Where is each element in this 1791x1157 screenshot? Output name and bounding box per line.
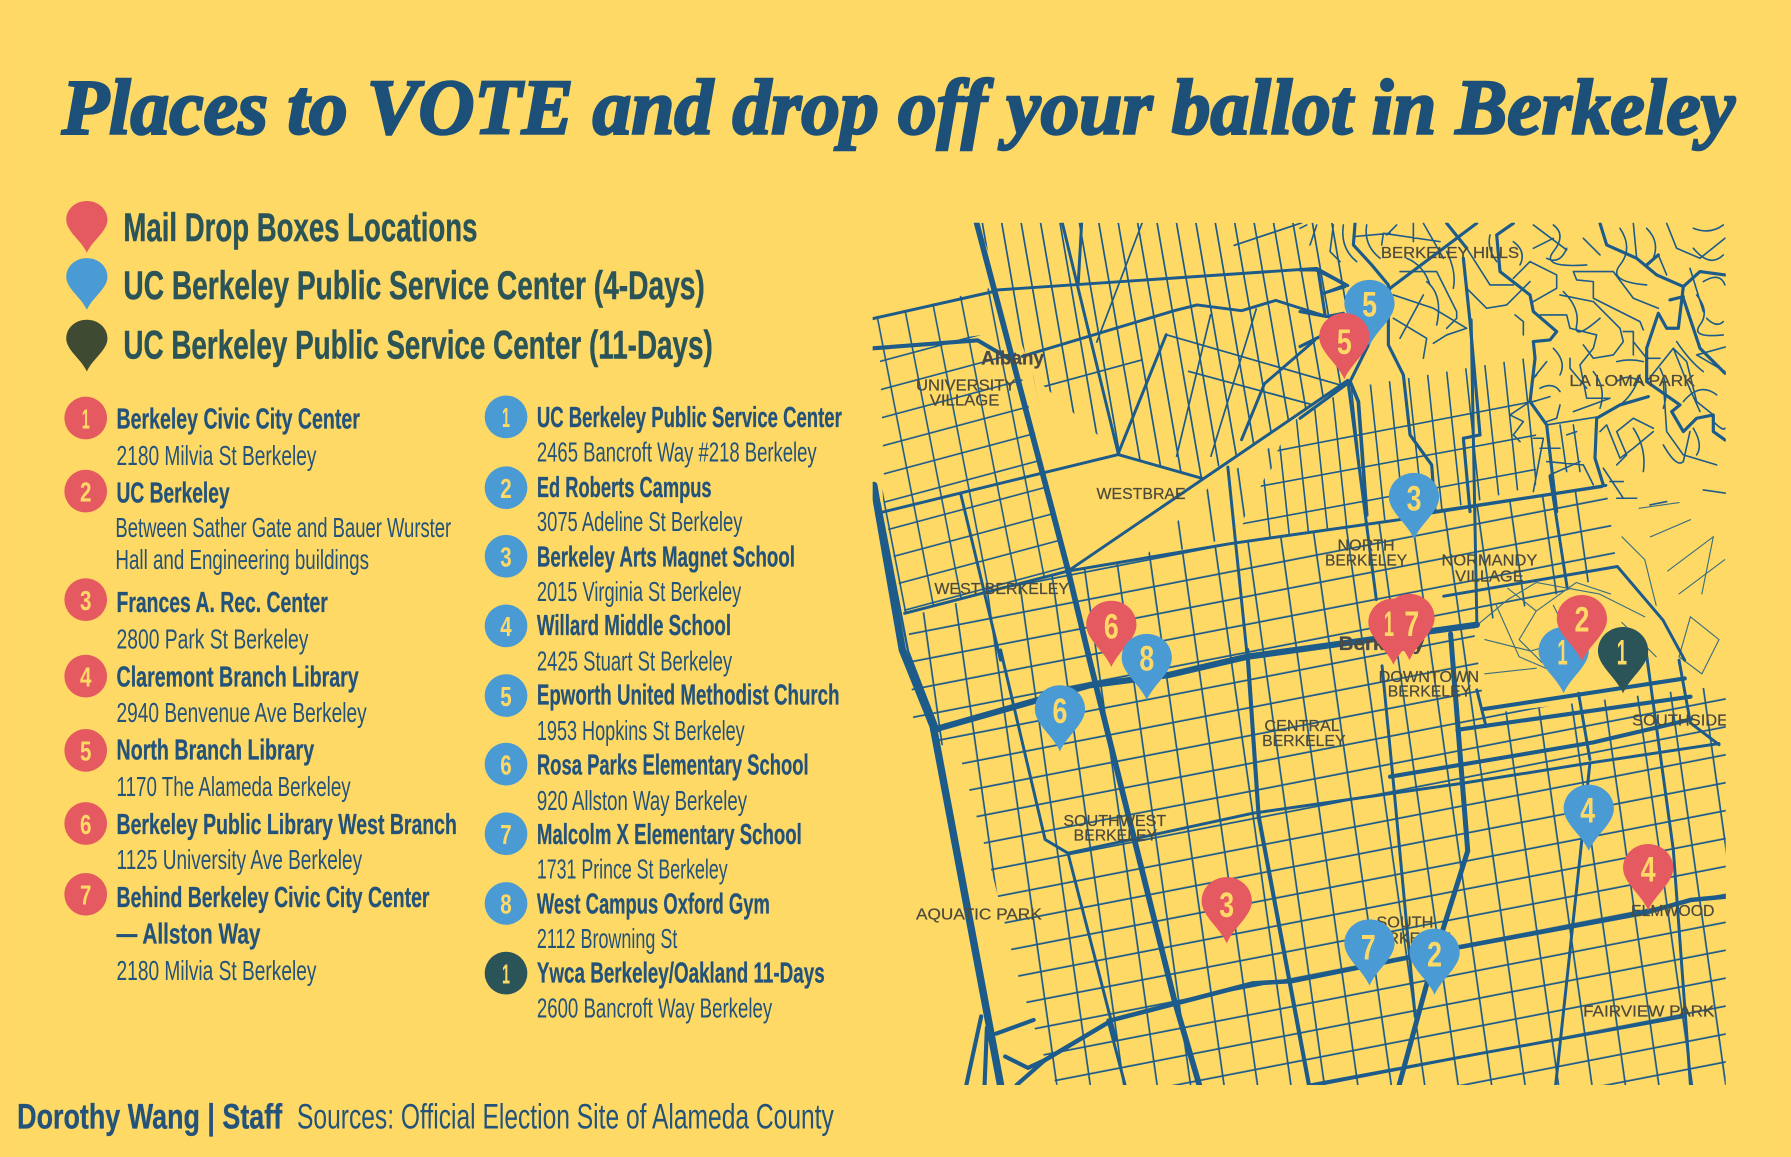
center 3: Berkeley Arts Magnet School [537, 542, 795, 574]
pin: blue 3 [1389, 473, 1439, 539]
neighborhood labels: LA LOMA PARK [1569, 373, 1695, 390]
neighborhood labels: SOUTHSIDE [1632, 712, 1728, 729]
neighborhood labels: ELMWOOD [1631, 903, 1714, 920]
neighborhood labels: SOUTHWEST [1063, 813, 1166, 830]
center 8: 2112 Browning St [537, 923, 678, 954]
item 7 [64, 873, 430, 986]
pin: red 2 [1557, 595, 1607, 661]
center 4: 4 [500, 611, 512, 642]
center 5 [485, 674, 840, 746]
item 5 [64, 729, 351, 802]
pin: blue 7: 7 [1361, 927, 1376, 967]
center 8: 8 [500, 889, 512, 920]
item 2: 2 [80, 476, 91, 507]
item 7: — Allston Way [117, 918, 261, 950]
pin: dark 1: 1 [1617, 633, 1627, 673]
center 7 [485, 812, 802, 884]
legend: 4-day centers: UC Berkeley Public Service Center (4-Days) [123, 264, 705, 308]
item 3: 3 [80, 585, 91, 616]
legend: mail drop boxes [66, 201, 477, 253]
item 2: Hall and Engineering buildings [115, 544, 369, 575]
item 6: Berkeley Public Library West Branch [117, 809, 457, 841]
center 1: 1 [502, 402, 510, 433]
item 7: 7 [80, 880, 91, 911]
pin: blue 1 [1539, 627, 1589, 693]
pin: red 1 [1368, 598, 1419, 665]
center 3 [485, 535, 795, 607]
center 7: 7 [500, 819, 512, 850]
neighborhood labels: BERKELEY HILLS [1381, 245, 1519, 262]
center 11-day 1: Ywca Berkeley/Oakland 11-Days [537, 957, 825, 989]
item 6 [64, 802, 457, 875]
center 7: 1731 Prince St Berkeley [537, 853, 728, 884]
pin: red 3: 3 [1219, 885, 1234, 925]
center 1: UC Berkeley Public Service Center [537, 402, 842, 434]
center 2: 3075 Adeline St Berkeley [537, 506, 743, 537]
pin: blue 3: 3 [1407, 479, 1421, 519]
neighborhood labels: NORMANDY [1441, 552, 1538, 569]
pin: blue 4 [1564, 785, 1614, 851]
neighborhood labels: AQUATIC PARK [916, 906, 1042, 923]
credit and sources: Sources: Official Election Site of Alameda County [297, 1096, 834, 1136]
center 11-day 1: 2600 Bancroft Way Berkeley [537, 993, 772, 1024]
item 3: Frances A. Rec. Center [117, 587, 328, 619]
major roads [873, 223, 1726, 1085]
neighborhood labels: BERKELEY [1388, 684, 1471, 701]
item 4: Claremont Branch Library [117, 661, 359, 693]
item 5: North Branch Library [117, 735, 314, 767]
item 6: 1125 University Ave Berkeley [117, 844, 362, 875]
credit and sources [17, 1096, 834, 1136]
item 1: 1 [82, 403, 90, 434]
center 6: Rosa Parks Elementary School [537, 749, 809, 781]
neighborhood labels: WESTBRAE [1097, 486, 1186, 503]
neighborhood labels: VILLAGE [1455, 568, 1524, 585]
neighborhood labels: DOWNTOWN [1379, 669, 1479, 686]
center 11-day 1: 1 [502, 958, 510, 989]
pin: dark 1 [1598, 627, 1648, 693]
center 7: Malcolm X Elementary School [537, 819, 802, 851]
item 2: Between Sather Gate and Bauer Wurster [115, 512, 451, 543]
pin: blue 8: 8 [1139, 638, 1154, 678]
legend: 4-day centers [66, 258, 705, 310]
item 4: 4 [80, 661, 92, 692]
legend: 11-day centers: UC Berkeley Public Service Center (11-Days) [123, 324, 713, 368]
center 5: 1953 Hopkins St Berkeley [537, 715, 745, 746]
pin: blue 6 [1035, 685, 1085, 752]
pin: blue 5: 5 [1362, 284, 1377, 324]
center 3: 3 [500, 542, 512, 573]
pin: red 6: 6 [1104, 606, 1119, 646]
center 2 [485, 466, 743, 537]
item 1: 2180 Milvia St Berkeley [117, 440, 317, 471]
pin: red 4: 4 [1641, 850, 1656, 890]
title: Places to VOTE and drop off your ballot in Berkeley [61, 65, 1736, 152]
center 11-day 1 [485, 952, 825, 1024]
item 3: 2800 Park St Berkeley [117, 624, 309, 655]
neighborhood labels: FAIRVIEW PARK [1583, 1004, 1715, 1021]
center 8: West Campus Oxford Gym [537, 889, 770, 921]
neighborhood labels [916, 245, 1728, 1021]
pin: red 1: 7 [1404, 604, 1419, 644]
neighborhood labels: Albany [981, 347, 1044, 369]
item 1: Berkeley Civic City Center [117, 403, 360, 435]
center 1 [485, 396, 842, 467]
center 2: Ed Roberts Campus [537, 472, 712, 504]
pin: blue 1: 1 [1557, 633, 1568, 673]
item 5: 5 [80, 736, 91, 767]
pin: red 2: 2 [1575, 600, 1589, 640]
pin: blue 5 [1344, 280, 1395, 346]
neighborhood labels: NORTH [1338, 538, 1395, 555]
center 6: 6 [500, 749, 512, 780]
center 5: 5 [500, 681, 512, 712]
pin: blue 2 [1409, 929, 1460, 995]
item 6: 6 [80, 809, 91, 840]
neighborhood labels: BERKELEY [1074, 828, 1157, 845]
neighborhood labels: BERKELEY [1262, 733, 1346, 750]
list: mail drop boxes [64, 397, 457, 986]
center 1: 2465 Bancroft Way #218 Berkeley [537, 436, 817, 467]
pin: blue 7 [1344, 919, 1395, 986]
neighborhood labels: WEST BERKELEY [934, 581, 1069, 598]
item 2 [64, 470, 451, 575]
item 5: 1170 The Alameda Berkeley [117, 771, 351, 802]
neighborhood labels: Berkeley [1339, 633, 1425, 655]
item 4: 2940 Benvenue Ave Berkeley [117, 697, 367, 728]
map pins [1035, 280, 1673, 995]
item 2: UC Berkeley [117, 478, 230, 510]
item 4 [64, 655, 367, 728]
pin: red 1: 1 [1384, 604, 1394, 644]
pin: blue 2: 2 [1427, 934, 1442, 974]
pin: red 4 [1623, 844, 1673, 910]
neighborhood labels: BERKELEY [1325, 552, 1408, 569]
center 6: 920 Allston Way Berkeley [537, 785, 747, 816]
center 4 [485, 605, 732, 676]
hills roads [1300, 223, 1727, 515]
item 7: 2180 Milvia St Berkeley [117, 955, 317, 986]
center 6 [485, 743, 809, 816]
center 2: 2 [500, 473, 512, 504]
neighborhood labels: UNIVERSITY [916, 378, 1016, 395]
legend [66, 201, 713, 371]
pin: red 7 [1394, 594, 1435, 660]
item 3 [64, 578, 328, 655]
pin: red 5 [1319, 313, 1369, 379]
center 5: Epworth United Methodist Church [537, 680, 840, 712]
pin: blue 4: 4 [1580, 790, 1595, 830]
neighborhood labels: CENTRAL [1264, 718, 1340, 735]
center 4: Willard Middle School [537, 610, 731, 642]
pin: blue 8 [1122, 634, 1172, 700]
pin: red 5: 5 [1337, 322, 1352, 362]
list: public service centers [485, 396, 842, 1024]
center 3: 2015 Virginia St Berkeley [537, 576, 741, 607]
center 8 [485, 882, 770, 954]
legend: mail drop boxes: Mail Drop Boxes Locations [123, 206, 477, 250]
pin: red 6 [1086, 601, 1136, 667]
legend: 11-day centers [66, 320, 713, 371]
street map [873, 223, 1728, 1085]
center 4: 2425 Stuart St Berkeley [537, 645, 732, 676]
pin: blue 6: 6 [1053, 691, 1067, 731]
neighborhood labels: VILLAGE [930, 392, 999, 409]
item 1 [64, 397, 360, 471]
item 7: Behind Berkeley Civic City Center [117, 882, 430, 914]
neighborhood labels: BERKELEY [1366, 930, 1451, 947]
faint campus and park lines [1473, 503, 1725, 674]
minor street grid [873, 223, 1726, 1085]
pin: red 3 [1202, 877, 1252, 943]
neighborhood labels: SOUTH [1376, 914, 1433, 931]
credit and sources: Dorothy Wang | Staff [17, 1096, 282, 1136]
